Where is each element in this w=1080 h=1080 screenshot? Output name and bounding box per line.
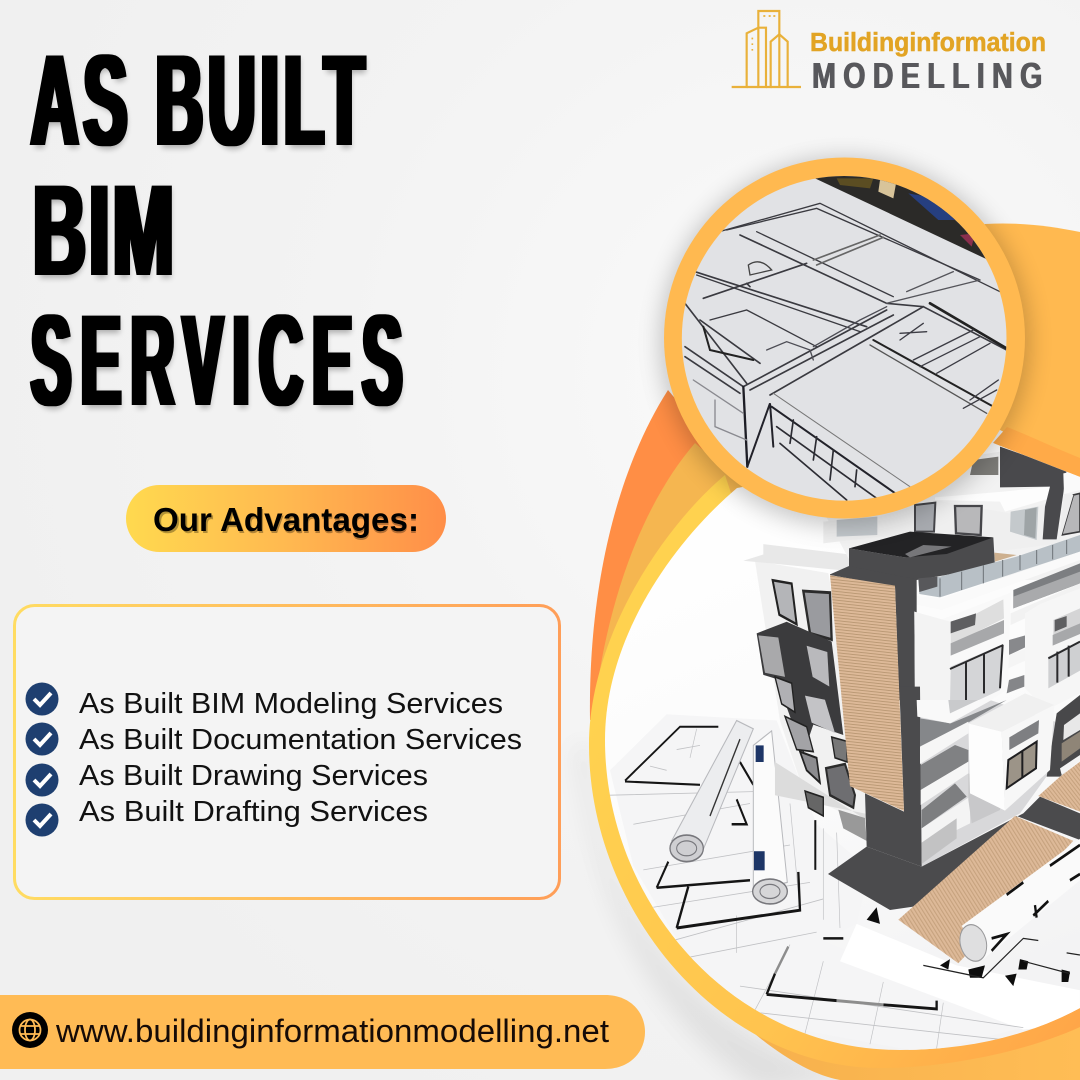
blueprint roll left [670,720,753,862]
badge: Our Advantages: Our Advantages: [153,501,419,538]
list item: drafting services: As Built Drafting Services [79,796,428,828]
title: As Built BIM Services: AS BUILT [33,31,366,176]
title: As Built BIM Services: BIM [35,162,176,306]
workshop backdrop [815,176,986,259]
list item: drafting services [26,796,428,836]
panel: orange curved backdrop [575,223,1080,1080]
blueprint sheets [610,714,1080,1052]
title: As Built BIM Services: AS BUILT [31,28,364,173]
logo word: MODELLING: MODELLING [812,55,1042,96]
balcony bands [920,700,1007,864]
title: As Built BIM Services: BIM [33,159,174,303]
roof box [849,532,995,580]
icon: globe [12,1012,48,1048]
white balcony box 2 [1025,608,1080,688]
website address: www.buildinginformationmodelling.net [55,1013,609,1049]
white balcony box 1 [914,600,1004,700]
timber deck right [1038,762,1080,812]
illustration: building on blueprints [610,440,1080,1053]
title: As Built BIM Services [31,28,404,436]
white box 3 [968,693,1054,811]
building upper storeys [824,446,1080,700]
dark right tower [1047,695,1080,777]
list item: drawing services: As Built Drawing Services [79,760,428,792]
wood cladding cap and column [830,566,917,700]
wood cladding and deck [830,575,1080,967]
list item: documentation services: As Built Documentation Services [79,724,522,756]
sketched building lines [685,203,1007,500]
badge: Our Advantages [126,485,446,552]
ground slab [828,797,1080,910]
blueprint roll front [955,839,1080,967]
logo word: Buildinginformation: Buildinginformation [810,29,1046,57]
title: As Built BIM Services: SERVICES [31,288,402,433]
icon: logo skyline [732,11,801,87]
badge: Our Advantages: Our Advantages: [155,503,419,540]
glass balcony rail [918,535,1080,598]
list item: modeling services: As Built BIM Modeling Services [79,688,503,720]
panel: circular sketch photo [661,158,1029,526]
left facade [743,544,867,841]
blueprint roll centre [753,731,787,904]
title: As Built BIM Services: SERVICES [33,291,404,436]
footer: website bar [0,995,645,1069]
logo: Building Information Modelling [732,11,1046,96]
building lower storeys and ground [828,687,1080,910]
panel: advantages list [14,606,560,898]
white box bottoms [917,700,992,723]
dark tower column [865,687,922,867]
